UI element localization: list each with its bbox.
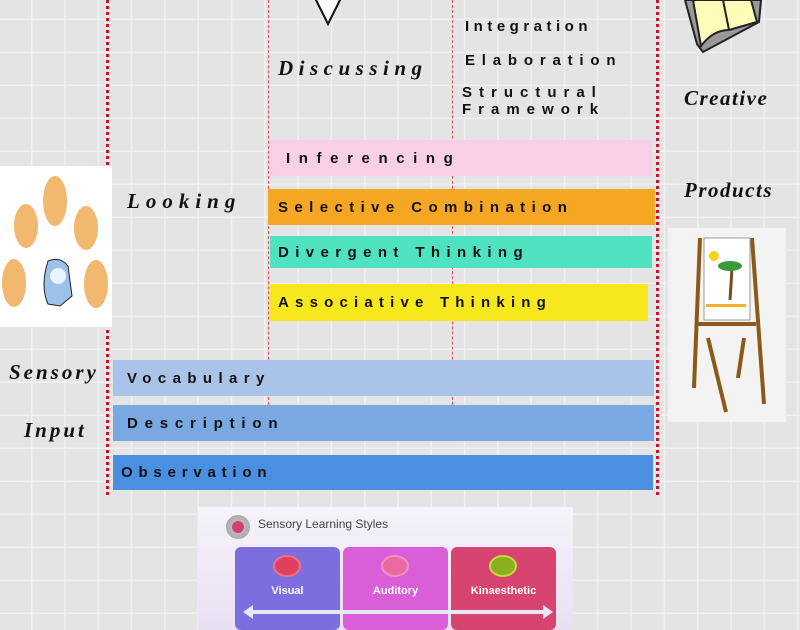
- card: Visual: Visual: [271, 585, 304, 597]
- card: Kinaesthetic: [451, 547, 556, 630]
- card: Auditory: Auditory: [373, 585, 418, 597]
- bar: Inferencing: [270, 140, 652, 176]
- red dotted boundary right: [656, 0, 659, 495]
- card: Visual: [235, 547, 340, 630]
- text: Structural Framework: [462, 84, 605, 118]
- bar: Observation: Observation: [121, 464, 272, 481]
- card: Kinaesthetic: Kinaesthetic: [471, 585, 536, 597]
- icon: open book: [684, 0, 762, 54]
- bar: Description: [113, 405, 654, 441]
- text: Structural Framework: Structural: [462, 84, 603, 101]
- bar: Vocabulary: [113, 360, 654, 396]
- arrow: double-headed: [243, 605, 553, 619]
- bar: Selective Combination: [268, 189, 655, 225]
- bar: Description: Description: [127, 414, 284, 432]
- image: senses head: [0, 166, 112, 327]
- card: Auditory: [343, 547, 448, 630]
- bar: Divergent Thinking: [270, 236, 652, 268]
- heading: Input: Input: [24, 418, 87, 442]
- text: Integration: Integration: [465, 18, 592, 35]
- heading: Looking: Looking: [127, 189, 241, 213]
- bar: Observation: [113, 455, 653, 490]
- bar: Divergent Thinking: Divergent Thinking: [278, 244, 529, 260]
- text: Elaboration: Elaboration: [465, 52, 622, 69]
- heading: Sensory Learning Styles: Sensory Learning Styles: [258, 517, 388, 531]
- icon: diamond sign: [314, 0, 342, 26]
- panel: Sensory Learning Styles: [198, 507, 573, 630]
- heading: Products: Products: [684, 178, 773, 202]
- red dotted boundary left: [106, 0, 109, 495]
- thin dashed guide 1: [268, 0, 269, 410]
- bar: Selective Combination: Selective Combination: [278, 198, 573, 216]
- text: Structural Framework: Framework: [462, 101, 605, 118]
- bar: Associative Thinking: [270, 284, 648, 321]
- bar: Inferencing: Inferencing: [286, 150, 461, 166]
- bar: Associative Thinking: Associative Thinking: [278, 294, 552, 311]
- heading: Discussing: Discussing: [278, 56, 428, 80]
- thin dashed guide 2: [452, 0, 453, 440]
- image: easel painting: [668, 228, 786, 422]
- icon: logo: [226, 515, 250, 539]
- heading: Creative: Creative: [684, 86, 768, 110]
- heading: Sensory: Sensory: [9, 360, 99, 384]
- bar: Vocabulary: Vocabulary: [127, 370, 271, 386]
